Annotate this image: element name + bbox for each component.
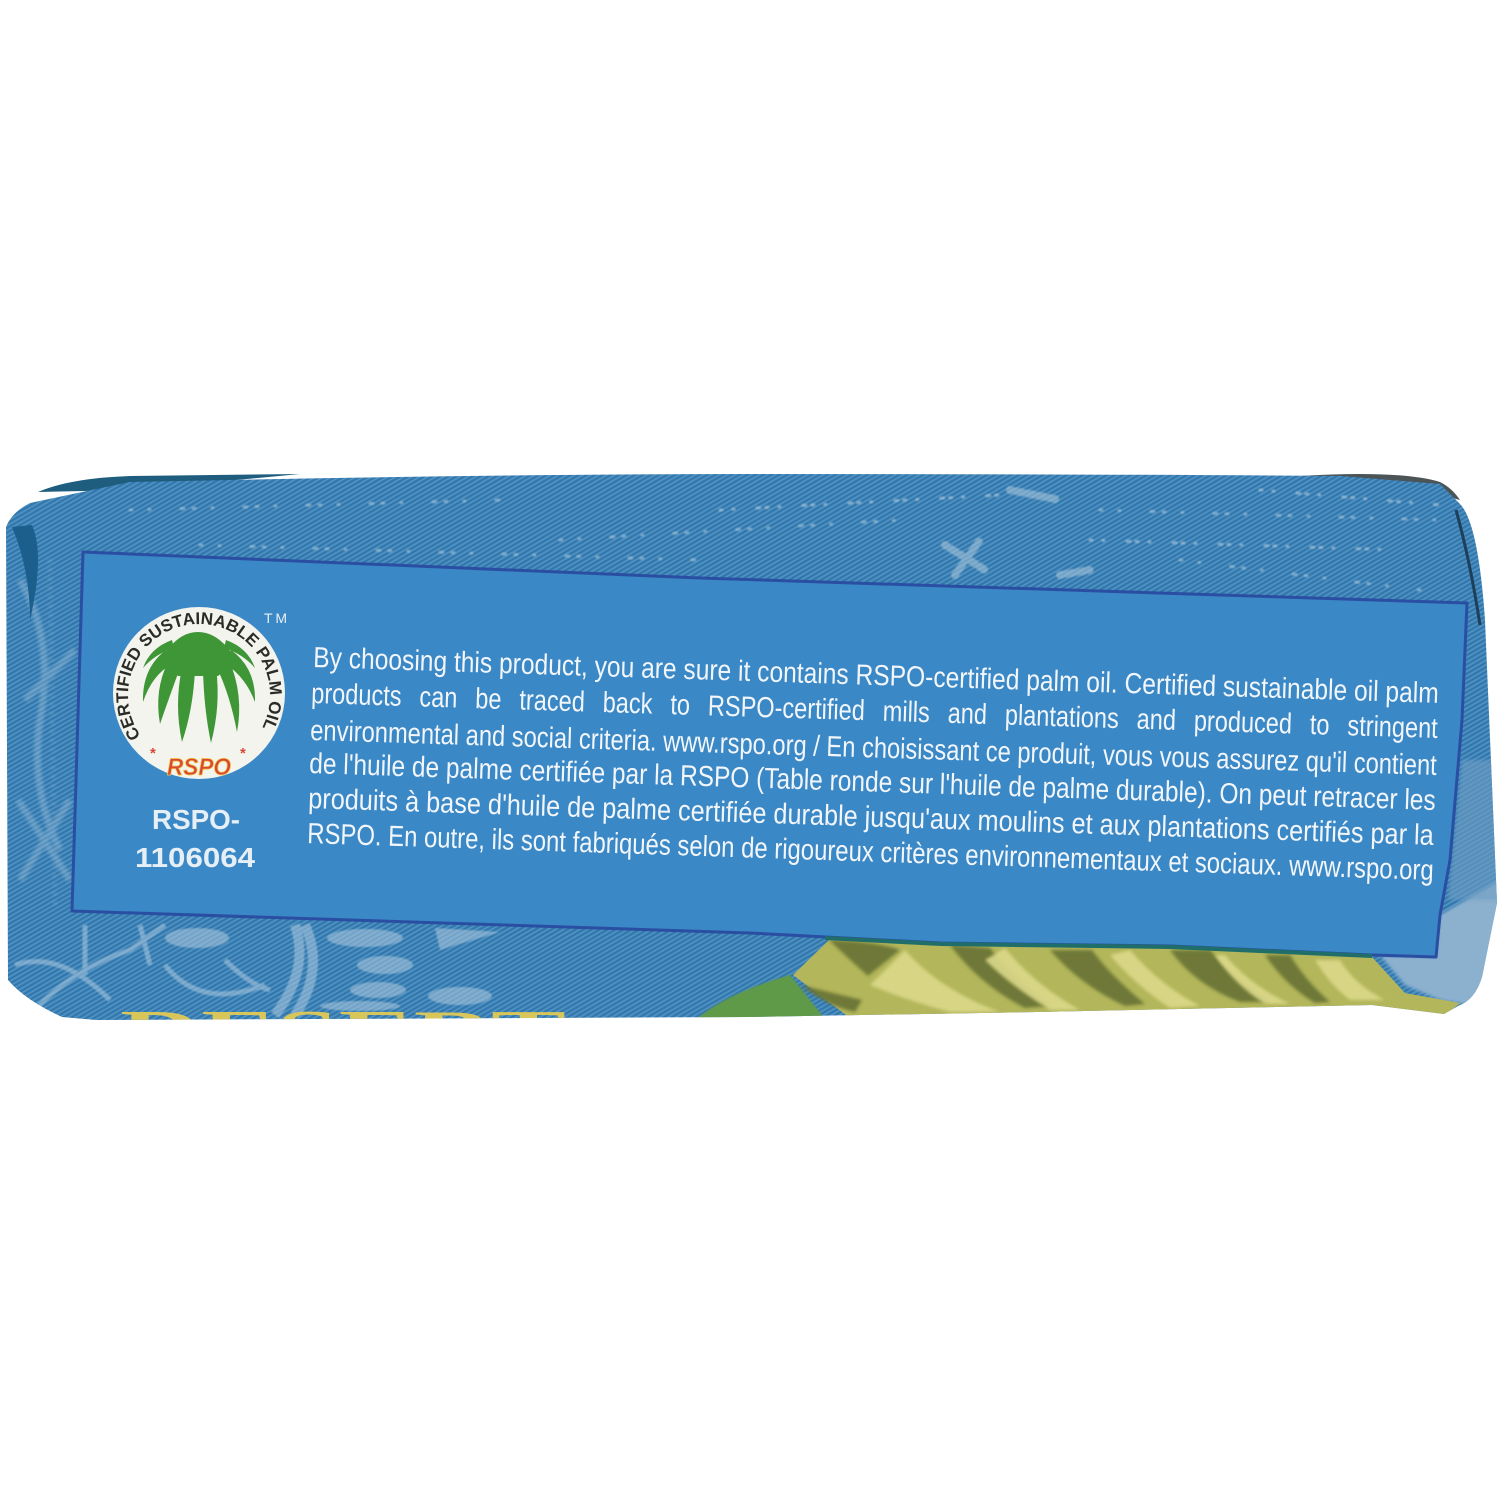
- palm tree icon: [143, 632, 255, 743]
- emblem ring text: CERTIFIED SUSTAINABLE PALM OIL: [116, 612, 282, 740]
- licence number: 1106064: [135, 842, 255, 873]
- right pale fabric strip: [1448, 760, 1500, 900]
- wrapper body: [0, 460, 1500, 1062]
- trademark mark: TM: [264, 610, 287, 626]
- left side ornament: [18, 560, 75, 910]
- certification paragraph: [307, 642, 1439, 887]
- emblem star right: *: [240, 745, 246, 762]
- bottom lace patches: [165, 928, 500, 1011]
- emblem stars: *: [150, 745, 156, 762]
- brand name DESERT cut off: DESERT: [120, 1000, 566, 1062]
- left wrapper fold: [12, 525, 38, 620]
- fabric background: [0, 460, 1500, 1030]
- emblem disc: [113, 607, 285, 779]
- right bottom pale fabric corner: [1380, 880, 1500, 1010]
- leaf shadows: [800, 940, 1330, 1012]
- label panel: [72, 552, 1467, 957]
- green hill: [698, 974, 824, 1018]
- wrapper top dark fold left: [38, 474, 300, 492]
- product photo: soap bar wrapper: [6, 474, 1497, 1020]
- licence number: RSPO-: [152, 804, 240, 835]
- bottom lace ornament: [15, 925, 313, 1015]
- licence number: [135, 804, 255, 873]
- right wrapper fold: [1456, 510, 1480, 625]
- wrapper top dark fold right: [1300, 474, 1460, 500]
- RSPO wordmark in emblem: RSPO: [167, 754, 231, 781]
- leaf top edge shadow: [825, 938, 1372, 956]
- lemongrass leaves band: [793, 940, 1460, 1018]
- leaf highlights: [870, 948, 1385, 1012]
- RSPO emblem: [113, 607, 285, 781]
- top speckle pattern: [130, 490, 1440, 590]
